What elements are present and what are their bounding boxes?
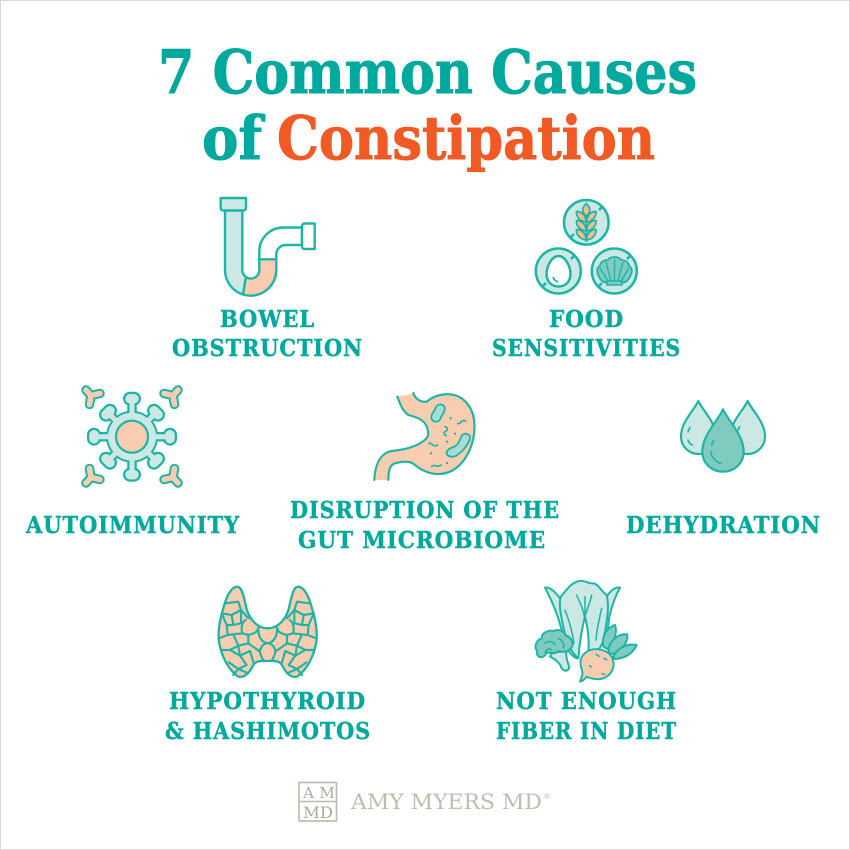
logo mark: A — [302, 784, 314, 802]
label: disruption of the gut microbiome: GUT MICROBIOME — [298, 526, 546, 554]
label: bowel obstruction: BOWEL — [220, 305, 315, 333]
label: disruption of the gut microbiome — [290, 496, 560, 554]
panel: not enough fiber in diet — [496, 581, 677, 745]
label: bowel obstruction — [172, 305, 363, 362]
panel: autoimmunity — [25, 390, 240, 539]
title: Constipation — [277, 104, 655, 174]
title — [158, 38, 697, 174]
label: hypothyroid and hashimotos — [165, 687, 371, 745]
label: food sensitivities: SENSITIVITIES — [492, 334, 681, 362]
panel: bowel obstruction — [172, 198, 363, 362]
panel: hypothyroid and hashimotos — [165, 587, 371, 745]
logo mark — [299, 782, 336, 822]
label: not enough fiber in diet — [496, 687, 677, 745]
label: hypothyroid and hashimotos: & HASHIMOTOS — [165, 717, 371, 745]
registered mark: ® — [544, 792, 550, 801]
logo mark: M — [319, 784, 335, 802]
label: not enough fiber in diet: NOT ENOUGH — [496, 687, 677, 715]
logo: Amy Myers MD — [299, 782, 550, 822]
panel: dehydration — [626, 401, 821, 539]
panel: disruption of the gut microbiome — [290, 393, 560, 554]
label: bowel obstruction: OBSTRUCTION — [172, 334, 363, 362]
label: food sensitivities: FOOD — [549, 305, 624, 333]
title: of — [202, 104, 266, 174]
icon: allergens — [536, 200, 637, 294]
label: autoimmunity: AUTOIMMUNITY — [25, 511, 240, 539]
title: 7 Common Causes — [158, 38, 697, 108]
panel: food sensitivities — [492, 200, 681, 362]
label: not enough fiber in diet: FIBER IN DIET — [496, 717, 677, 745]
icon: vegetables — [536, 581, 637, 682]
icon: stomach — [374, 393, 475, 480]
label: dehydration: DEHYDRATION — [626, 511, 821, 539]
label: food sensitivities — [492, 305, 681, 362]
icon: pipe — [221, 198, 315, 296]
logo wordmark: AMY MYERS MD — [350, 790, 542, 814]
icon: thyroid — [219, 587, 317, 677]
label: disruption of the gut microbiome: DISRUPTION OF THE — [290, 496, 560, 524]
icon: water drops — [681, 401, 765, 472]
icon: virus and antibodies — [86, 390, 178, 483]
label: hypothyroid and hashimotos: HYPOTHYROID — [169, 687, 366, 715]
logo mark: MD — [303, 803, 333, 822]
